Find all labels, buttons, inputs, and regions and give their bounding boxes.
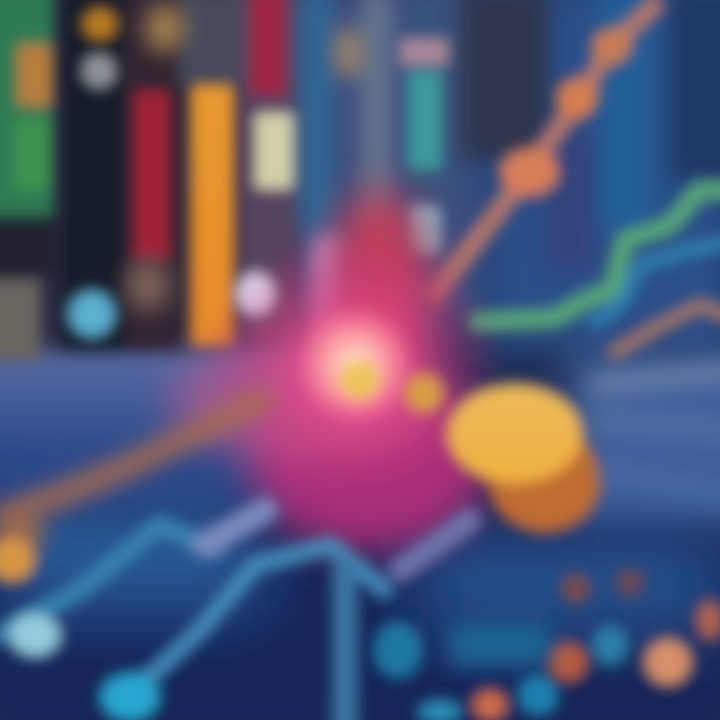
right dark blue panels (545, 0, 720, 270)
glowing orange node (0, 538, 36, 582)
left chart screen (0, 0, 55, 360)
white glow marker (236, 272, 276, 316)
orange rising trend (430, 0, 660, 300)
red central glow (170, 190, 505, 550)
tan marker (145, 4, 185, 52)
pale lilac column (313, 236, 345, 346)
red bar (134, 90, 170, 260)
amber marker (82, 7, 118, 41)
teal block (408, 70, 442, 170)
small glowing coins (340, 361, 444, 413)
blue glow marker (68, 290, 116, 338)
gold coin stack (447, 384, 601, 532)
right green and blue lines (470, 190, 720, 355)
tan lower marker (126, 259, 170, 311)
orange bar (191, 84, 234, 346)
left orange trend (0, 395, 270, 550)
column markers and bars (68, 0, 296, 346)
blue lower trend lines (0, 510, 470, 720)
bottom glowing dots (9, 568, 720, 720)
dark columns (62, 0, 300, 350)
right horizontal streaks (590, 370, 720, 500)
central columns (300, 0, 550, 346)
crimson bar (250, 0, 286, 95)
pale blue block (408, 206, 440, 254)
grey marker (81, 53, 117, 89)
pale yellow block (254, 112, 296, 190)
